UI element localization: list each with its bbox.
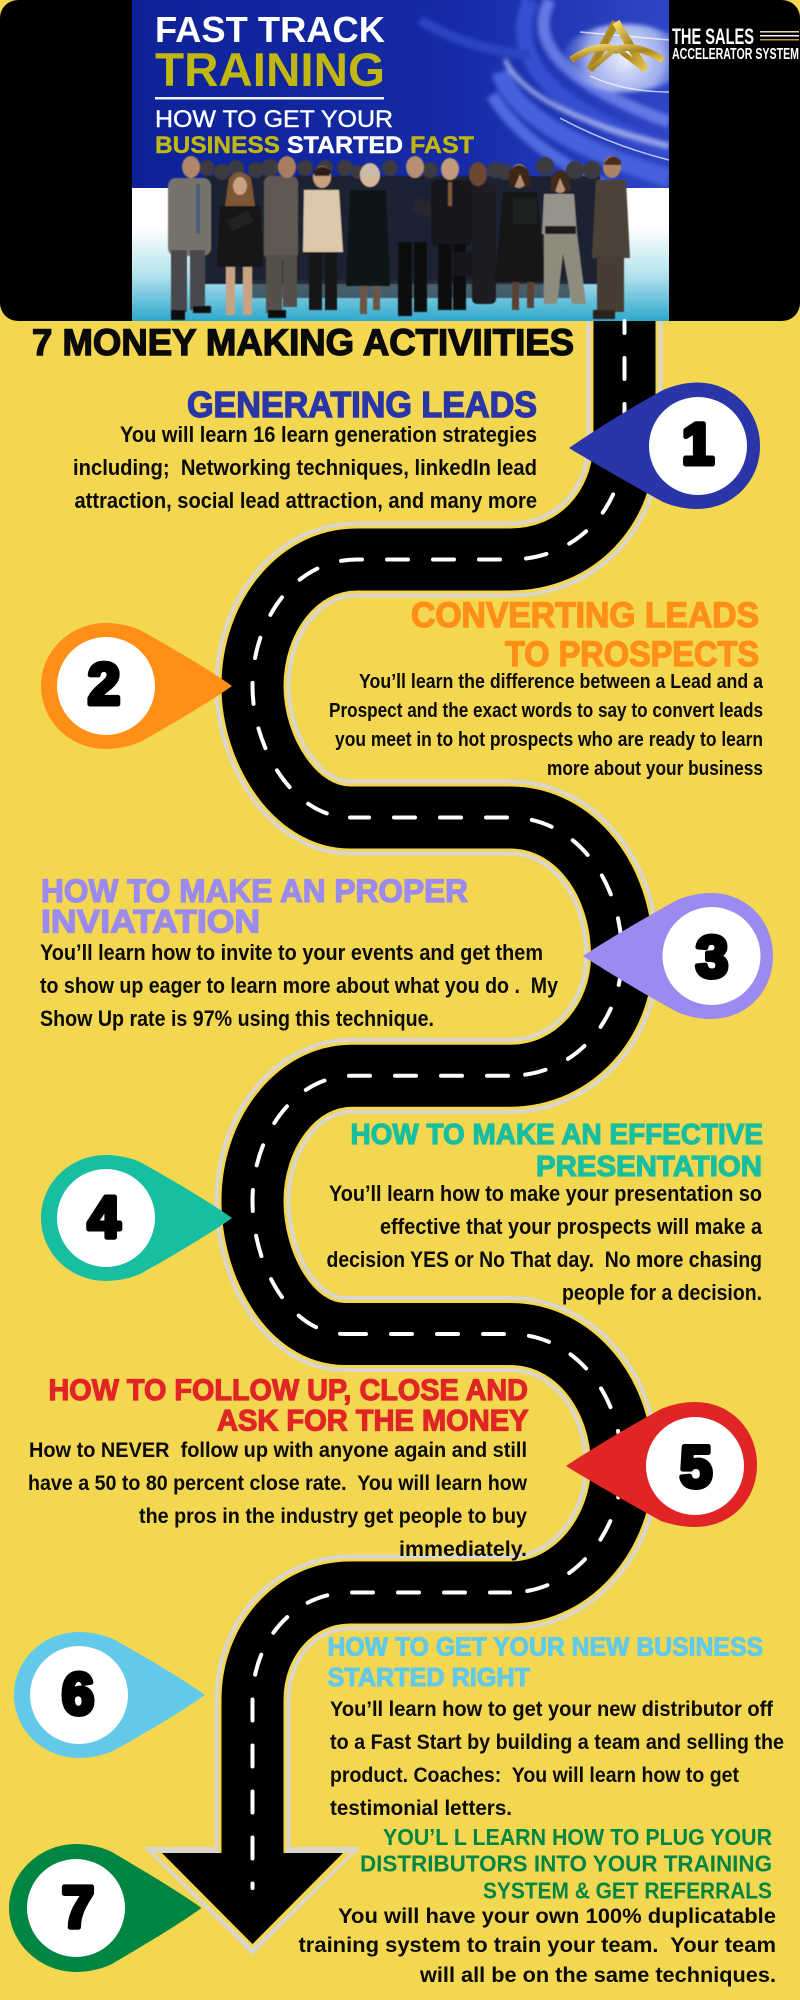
heading: HOW TO FOLLOW UP, CLOSE AND [48,1374,528,1407]
heading: TO PROSPECTS [505,635,759,674]
pin 2 [41,623,232,749]
heading: HOW TO GET YOUR NEW BUSINESS [328,1632,763,1662]
body text: have a 50 to 80 percent close rate. You will learn how [28,1472,528,1495]
body text: You will have your own 100% duplicatable [338,1905,776,1928]
person 5 [346,163,390,314]
title: 7 MONEY MAKING ACTIVIITIES [32,322,574,363]
person 7 [431,157,472,311]
pin 2: 2 [88,652,120,717]
body text [298,1905,776,1987]
person 11 [592,156,630,319]
body text [326,1181,763,1305]
section 1: generating leads [73,384,537,513]
heading [360,1824,772,1904]
section 2: converting leads to prospects [329,596,764,780]
heading: INVIATATION [41,904,260,940]
body text: the pros in the industry get people to buy [139,1505,527,1528]
section 6: new business started right [328,1632,784,1820]
heading [411,596,759,674]
pin 6 [14,1632,205,1758]
subheadline: business started fast: FAST [410,132,474,159]
brand: the sales accelerator system [672,24,799,63]
pin 7 [9,1844,202,1972]
person 3 [264,156,298,318]
body text: You will learn 16 learn generation strategies [120,422,537,447]
pin 5 [566,1402,757,1527]
section 7: training system and referrals [298,1824,776,1987]
subheadline: how to get your: HOW TO GET YOUR [155,106,393,133]
pin 4: 4 [88,1185,120,1250]
body text [329,671,764,780]
headline: fast track: FAST TRACK [155,9,385,50]
heading: YOU’L L LEARN HOW TO PLUG YOUR [383,1824,772,1850]
heading: GENERATING LEADS [187,384,537,425]
heading [48,1374,528,1438]
pin 1: 1 [682,412,714,477]
body text: immediately. [399,1538,527,1561]
heading: DISTRIBUTORS INTO YOUR TRAINING [360,1850,772,1876]
body text: effective that your prospects will make a [380,1214,763,1239]
person 1 [168,156,211,320]
body text: including; Networking techniques, linkedIn lead [73,455,537,480]
body text: Show Up rate is 97% using this technique. [40,1006,434,1031]
subheadline: business started fast [156,136,474,154]
body text: to a Fast Start by building a team and selling the [330,1731,784,1754]
person 2 [217,172,263,315]
section 3: proper invitation [40,873,559,1031]
pin 7: 7 [62,1875,94,1940]
person 10 [542,170,586,304]
background crowd [205,176,600,284]
crowd of business people [168,156,630,320]
section 5: follow up and close [28,1374,528,1561]
heading: HOW TO MAKE AN PROPER [41,873,468,909]
heading: HOW TO MAKE AN EFFECTIVE [350,1119,763,1151]
body text: You’ll learn how to invite to your events and get them [40,940,543,965]
subheadline: business started fast: STARTED [287,132,403,159]
body text: You’ll learn how to get your new distributor off [330,1698,774,1721]
body text: will all be on the same techniques. [419,1964,776,1987]
heading [328,1632,763,1692]
body text: attraction, social lead attraction, and many more [74,488,537,513]
body text: to show up eager to learn more about what you do . My [40,973,559,998]
body text [73,422,537,513]
heading: STARTED RIGHT [328,1662,530,1692]
brand: the sales accelerator system: THE SALES [672,24,754,49]
heading: PRESENTATION [536,1151,762,1183]
body text: people for a decision. [562,1280,762,1305]
headline: training: TRAINING [155,43,385,96]
person 8 [469,162,496,304]
heading: CONVERTING LEADS [411,596,759,635]
body text: product. Coaches: You will learn how to get [330,1764,739,1787]
subheadline: business started fast: BUSINESS [155,132,280,159]
body text [40,940,559,1031]
pin 6: 6 [62,1662,94,1727]
road with dashed centre line and arrowhead [143,321,624,1955]
heading [350,1119,763,1183]
body text: You’ll learn how to make your presentation so [329,1181,762,1206]
body text: training system to train your team. Your team [298,1934,776,1957]
section 4: effective presentation [326,1119,763,1305]
body text: testimonial letters. [330,1797,512,1820]
body text: more about your business [547,758,763,780]
pin 5: 5 [680,1435,712,1500]
body text: How to NEVER follow up with anyone again and still [29,1439,527,1462]
person 6 [397,155,430,317]
pin 1 [569,382,760,509]
icon: gold accelerator logo [571,22,663,70]
header banner [0,0,800,321]
person 4 [303,166,343,310]
heading: ASK FOR THE MONEY [217,1405,528,1438]
pin 4 [41,1155,232,1281]
pin 3 [583,893,773,1019]
pin 3: 3 [696,925,728,990]
heading: SYSTEM & GET REFERRALS [483,1878,772,1904]
photo panel: fast track training [132,0,687,321]
body text [330,1698,784,1820]
body text [28,1439,528,1561]
heading [41,873,468,940]
person 9 [495,164,545,310]
